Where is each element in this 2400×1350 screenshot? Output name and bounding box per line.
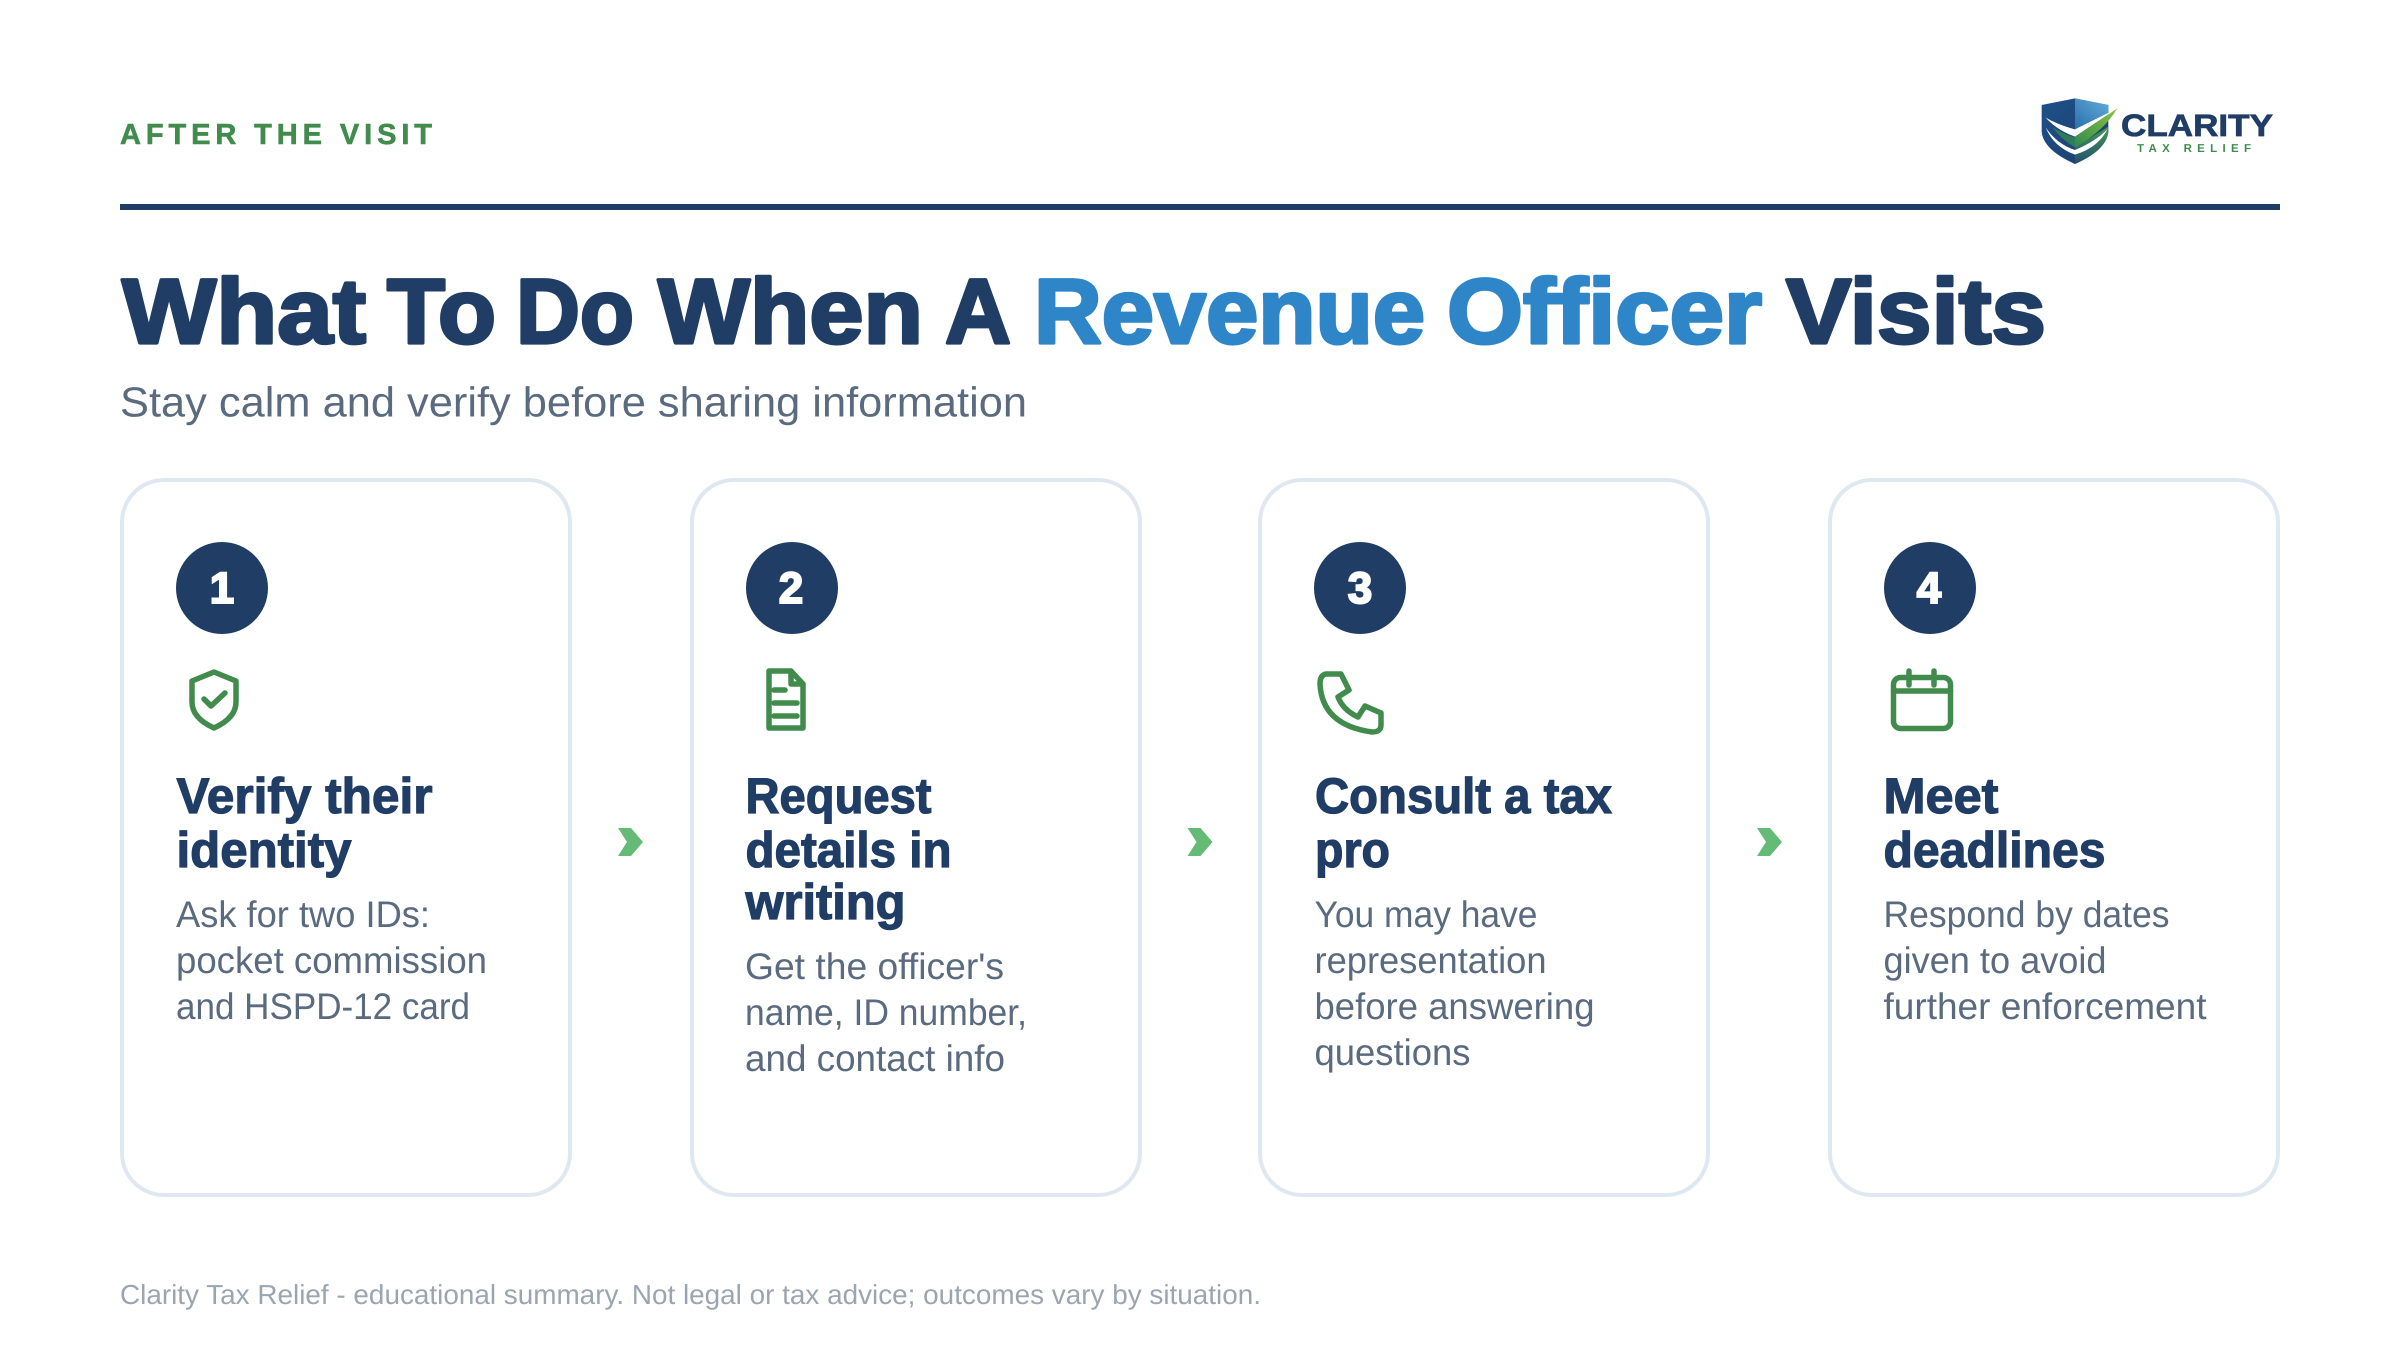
step number 3: 3 <box>1348 564 1372 613</box>
title <box>122 261 2046 363</box>
step number 4 <box>1884 542 1976 634</box>
body text: You may have <box>1314 894 1538 935</box>
body text: and contact info <box>745 1038 1005 1079</box>
heading: verify their identity: identity <box>176 822 352 878</box>
body text: Ask for two IDs: <box>176 894 430 935</box>
title: Officer <box>1447 261 1762 363</box>
body text <box>745 946 1027 1079</box>
body text: name, ID number, <box>745 992 1027 1033</box>
body text: Get the officer's <box>745 946 1004 987</box>
body text: Respond by dates <box>1884 894 2170 935</box>
heading: meet deadlines: Meet <box>1884 768 1999 824</box>
step number 4: 4 <box>1917 564 1942 613</box>
heading: verify their identity: Verify their <box>176 768 432 824</box>
step number 1: 1 <box>210 564 234 613</box>
footer disclaimer: Clarity Tax Relief - educational summary. Not legal or tax advice; outcomes vary by situation. <box>120 1279 1261 1310</box>
title: To <box>387 261 496 363</box>
heading: request details in writing <box>745 768 952 930</box>
body text: further enforcement <box>1884 986 2207 1027</box>
panel: step 1 verify identity <box>122 480 570 1195</box>
body text <box>176 894 487 1027</box>
arrow 1 <box>618 828 643 856</box>
body text: pocket commission <box>176 940 487 981</box>
body text: questions <box>1314 1032 1470 1073</box>
heading: request details in writing: writing <box>745 874 906 930</box>
title: Do <box>516 261 634 363</box>
heading: meet deadlines: deadlines <box>1884 822 2106 878</box>
panel: step 3 consult a tax pro <box>1260 480 1708 1195</box>
body text <box>1884 894 2207 1027</box>
logo: Clarity Tax Relief <box>2042 98 2273 164</box>
heading: verify their identity <box>176 768 432 878</box>
panel: step 2 request details <box>692 480 1140 1195</box>
step number 2: 2 <box>779 564 803 613</box>
icon: phone <box>1320 674 1381 732</box>
body text <box>1314 894 1594 1073</box>
icon: document <box>769 671 803 728</box>
subtitle: Stay calm and verify before sharing information <box>120 378 1027 426</box>
heading: consult a tax pro <box>1315 768 1612 878</box>
arrow 2 <box>1188 828 1212 856</box>
header rule <box>120 204 2280 210</box>
body text: and HSPD-12 card <box>176 986 470 1027</box>
logo: Clarity Tax Relief: CLARITY <box>2121 108 2273 143</box>
title: Visits <box>1786 261 2046 363</box>
heading: request details in writing: Request <box>746 768 932 824</box>
step number 2 <box>746 542 838 634</box>
title: What <box>122 261 366 363</box>
heading: consult a tax pro: pro <box>1315 822 1390 878</box>
body text: before answering <box>1314 986 1594 1027</box>
logo: Clarity Tax Relief: TAX RELIEF <box>2137 143 2251 155</box>
step number 3 <box>1314 542 1406 634</box>
title: A <box>945 261 1011 363</box>
title: When <box>658 261 923 363</box>
title: Revenue <box>1034 261 1425 363</box>
icon: shield check <box>192 672 236 728</box>
panel: step 4 meet deadlines <box>1830 480 2278 1195</box>
body text: given to avoid <box>1884 940 2106 981</box>
heading: consult a tax pro: Consult a tax <box>1315 768 1612 824</box>
step number 1 <box>176 542 268 634</box>
eyebrow label: AFTER THE VISIT <box>120 119 432 151</box>
heading: meet deadlines <box>1884 768 2106 878</box>
heading: request details in writing: details in <box>746 822 952 878</box>
arrow 3 <box>1757 828 1782 856</box>
body text: representation <box>1314 940 1546 981</box>
icon: calendar <box>1894 671 1950 728</box>
